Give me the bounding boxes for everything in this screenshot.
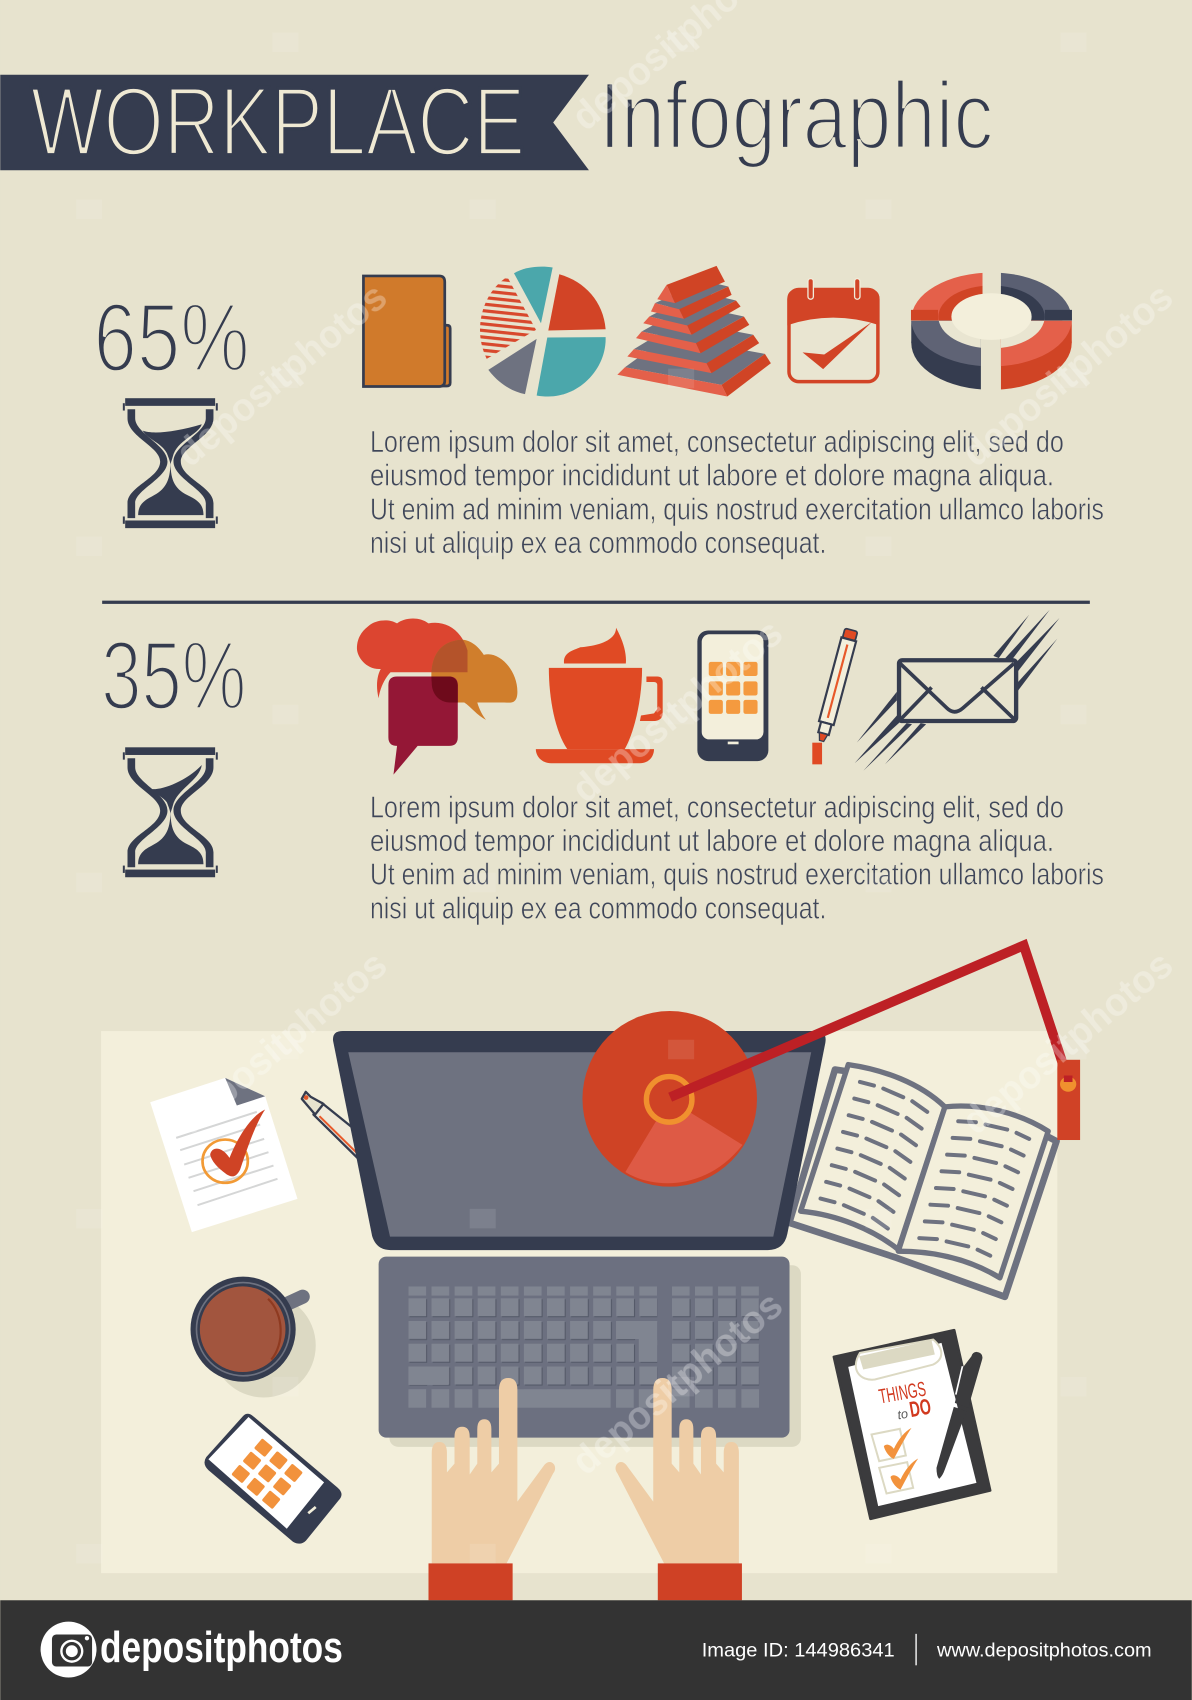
open book: [789, 1065, 1057, 1297]
stat: 65 percent: 65%: [93, 283, 250, 392]
book text lines: [821, 1082, 1029, 1256]
laptop screen: [333, 1031, 826, 1250]
watermarks: depositphotos: [564, 611, 791, 811]
footer bar: [0, 1600, 1192, 1700]
desk surface: [101, 1031, 1057, 1573]
icon: hourglass 35: [123, 747, 218, 877]
sticky note with check: [150, 1078, 297, 1232]
icon: ring chart: [911, 273, 1072, 390]
desk lamp: [582, 945, 1080, 1187]
clipboard heading: THINGS: [877, 1378, 928, 1408]
stat: 35 percent: 35%: [101, 621, 246, 730]
icon: speech bubbles: [357, 618, 517, 775]
watermarks: depositphotos: [954, 275, 1181, 475]
pen beside laptop: [302, 1092, 361, 1161]
icon: marker pen: [812, 628, 859, 764]
icon: flying envelope: [855, 610, 1059, 771]
clipboard heading: to: [896, 1407, 909, 1422]
watermarks: [168, 0, 1181, 1484]
icon: coffee cup: [536, 628, 663, 763]
description text 2: eiusmod tempor incididunt ut labore et dolore magna aliqua.: [370, 825, 1054, 858]
left hand: [432, 1378, 555, 1563]
title: workplace: WORKPLACE: [31, 67, 525, 176]
clipboard with to-do list: [834, 1330, 990, 1519]
coffee mug: [191, 1277, 316, 1398]
icon: folder: [363, 276, 450, 387]
icon: pie chart: [480, 267, 606, 396]
icon: pyramid: [617, 266, 771, 396]
description text 2: Lorem ipsum dolor sit amet, consectetur adipiscing elit, sed do: [370, 791, 1064, 824]
description text 1: eiusmod tempor incididunt ut labore et dolore magna aliqua.: [370, 460, 1054, 493]
left sleeve: [428, 1563, 513, 1600]
subtitle: infographic: Infographic: [599, 64, 993, 170]
laptop keyboard: [379, 1257, 801, 1447]
description text 2: nisi ut aliquip ex ea commodo consequat.: [370, 892, 826, 925]
watermarks: depositphotos: [168, 943, 395, 1143]
description text 1: [370, 426, 1104, 560]
description text 1: Lorem ipsum dolor sit amet, consectetur adipiscing elit, sed do: [370, 426, 1064, 459]
brand name: depositphotos: [100, 1624, 343, 1672]
right sleeve: [658, 1563, 742, 1600]
image id: Image ID: 144986341: [702, 1640, 895, 1662]
clipboard heading: DO: [908, 1394, 933, 1422]
description text 1: nisi ut aliquip ex ea commodo consequat.: [370, 527, 826, 560]
icon: calendar: [787, 279, 880, 382]
icon: hourglass 65: [123, 398, 218, 528]
right hand: [616, 1378, 739, 1563]
icon: smartphone: [697, 630, 768, 761]
watermarks: depositphotos: [564, 1283, 791, 1484]
description text 2: [370, 791, 1104, 925]
logo: camera: [41, 1622, 97, 1678]
watermarks: depositphotos: [168, 275, 395, 475]
clipboard heading: [877, 1377, 933, 1427]
phone on desk: [205, 1414, 342, 1544]
watermark camera marks: [76, 33, 1087, 1563]
pen on clipboard: [936, 1352, 982, 1479]
watermarks: depositphotos: [954, 943, 1181, 1143]
website: www.depositphotos.com: [936, 1640, 1152, 1662]
title banner: [0, 67, 589, 176]
